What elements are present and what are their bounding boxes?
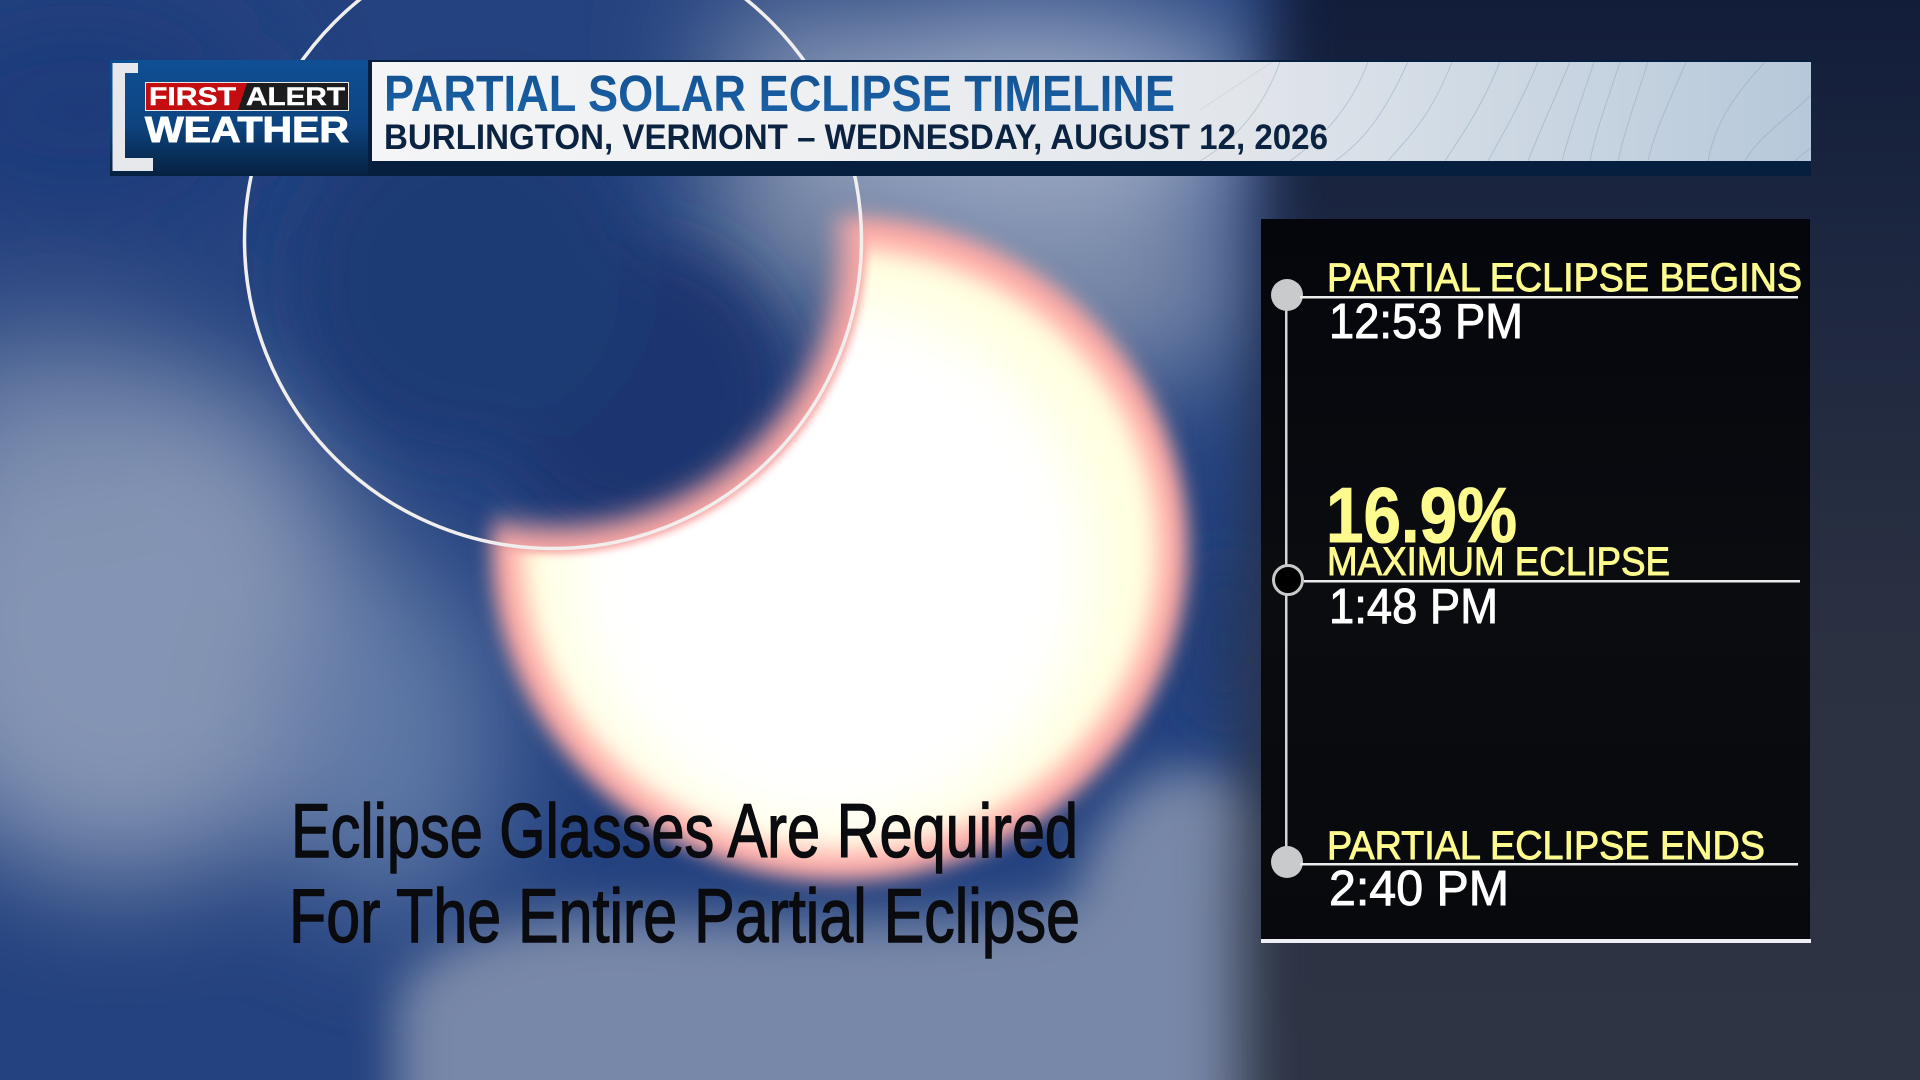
first alert badge: ALERT [246,83,345,111]
weather wordmark: WEATHER [145,109,349,150]
logo bracket [112,63,153,171]
title: PARTIAL SOLAR ECLIPSE TIMELINE [384,65,1175,122]
first alert badge [146,82,348,111]
event: partial eclipse ends [1271,824,1798,916]
callout: eclipse glasses [289,789,1080,959]
panel: timeline [1261,219,1811,943]
banner backing [110,60,1811,176]
logo block [110,60,368,176]
callout: eclipse glasses: Eclipse Glasses Are Required [291,789,1078,874]
event: partial eclipse begins: 12:53 PM [1329,295,1523,349]
event: maximum eclipse [1274,471,1800,634]
event: maximum eclipse: MAXIMUM ECLIPSE [1327,540,1670,584]
event: partial eclipse ends: 2:40 PM [1329,862,1509,916]
event: partial eclipse ends: PARTIAL ECLIPSE ENDS [1327,824,1765,868]
header banner [110,60,1811,176]
title bar [372,62,1811,161]
shadowed sky inside moon [300,110,1251,720]
lower cloud bank [367,742,1274,1080]
dark right side of sky [1150,0,1920,1080]
first alert badge: FIRST [149,83,236,111]
moon outline [244,0,862,548]
event: maximum eclipse: 1:48 PM [1329,580,1498,634]
subtitle: BURLINGTON, VERMONT – WEDNESDAY, AUGUST 12, 2026 [384,118,1328,157]
sky background with clouds [0,0,1282,1080]
event: partial eclipse begins: PARTIAL ECLIPSE BEGINS [1327,256,1802,300]
bar contour lines [1200,62,1811,161]
timeline spine [1285,295,1288,862]
callout: eclipse glasses: For The Entire Partial Eclipse [289,874,1080,959]
event: maximum eclipse: 16.9% [1326,471,1517,559]
event: partial eclipse begins [1271,256,1802,349]
eclipsed sun [492,216,1188,880]
